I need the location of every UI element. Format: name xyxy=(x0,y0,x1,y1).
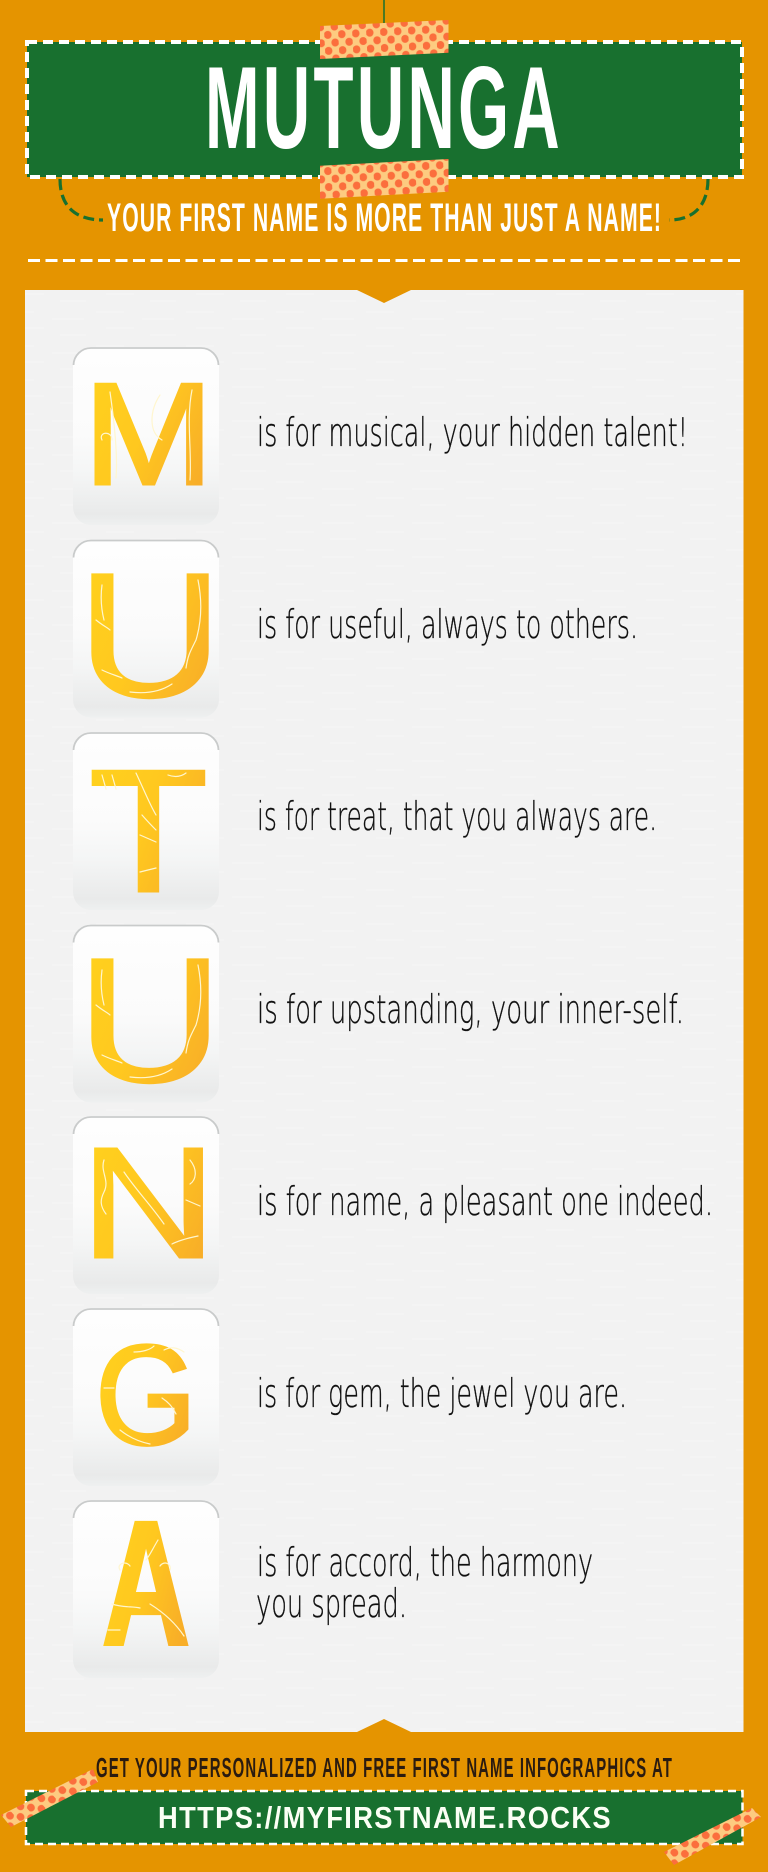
row: U xyxy=(73,537,638,733)
tile G: G xyxy=(95,1315,197,1474)
tile A xyxy=(73,1486,219,1682)
tile M: M xyxy=(83,352,214,515)
row: N xyxy=(73,1115,713,1294)
description A: you spread. xyxy=(256,1582,407,1627)
footer banner xyxy=(1,1769,761,1865)
row: G xyxy=(73,1308,627,1486)
tape: right xyxy=(664,1808,761,1865)
footer url: HTTPS://MYFIRSTNAME.ROCKS xyxy=(158,1801,612,1835)
tape: left xyxy=(1,1769,98,1827)
header banner xyxy=(27,0,742,199)
row: U second xyxy=(73,922,684,1118)
main panel xyxy=(25,290,744,1732)
tape: top xyxy=(320,20,448,59)
row: T xyxy=(73,732,657,929)
tile G xyxy=(73,1308,219,1486)
tile U second: U xyxy=(78,922,222,1118)
subtitle with curved connectors xyxy=(60,179,708,240)
tile U: U xyxy=(78,537,222,733)
tape: bottom xyxy=(320,159,448,199)
tile T: T xyxy=(89,735,208,929)
row: A xyxy=(73,1486,593,1682)
description A xyxy=(256,1541,593,1627)
tile N: N xyxy=(80,1115,217,1290)
row: M xyxy=(73,347,688,525)
description A: is for accord, the harmony xyxy=(257,1541,593,1586)
tile A: A xyxy=(102,1486,190,1682)
